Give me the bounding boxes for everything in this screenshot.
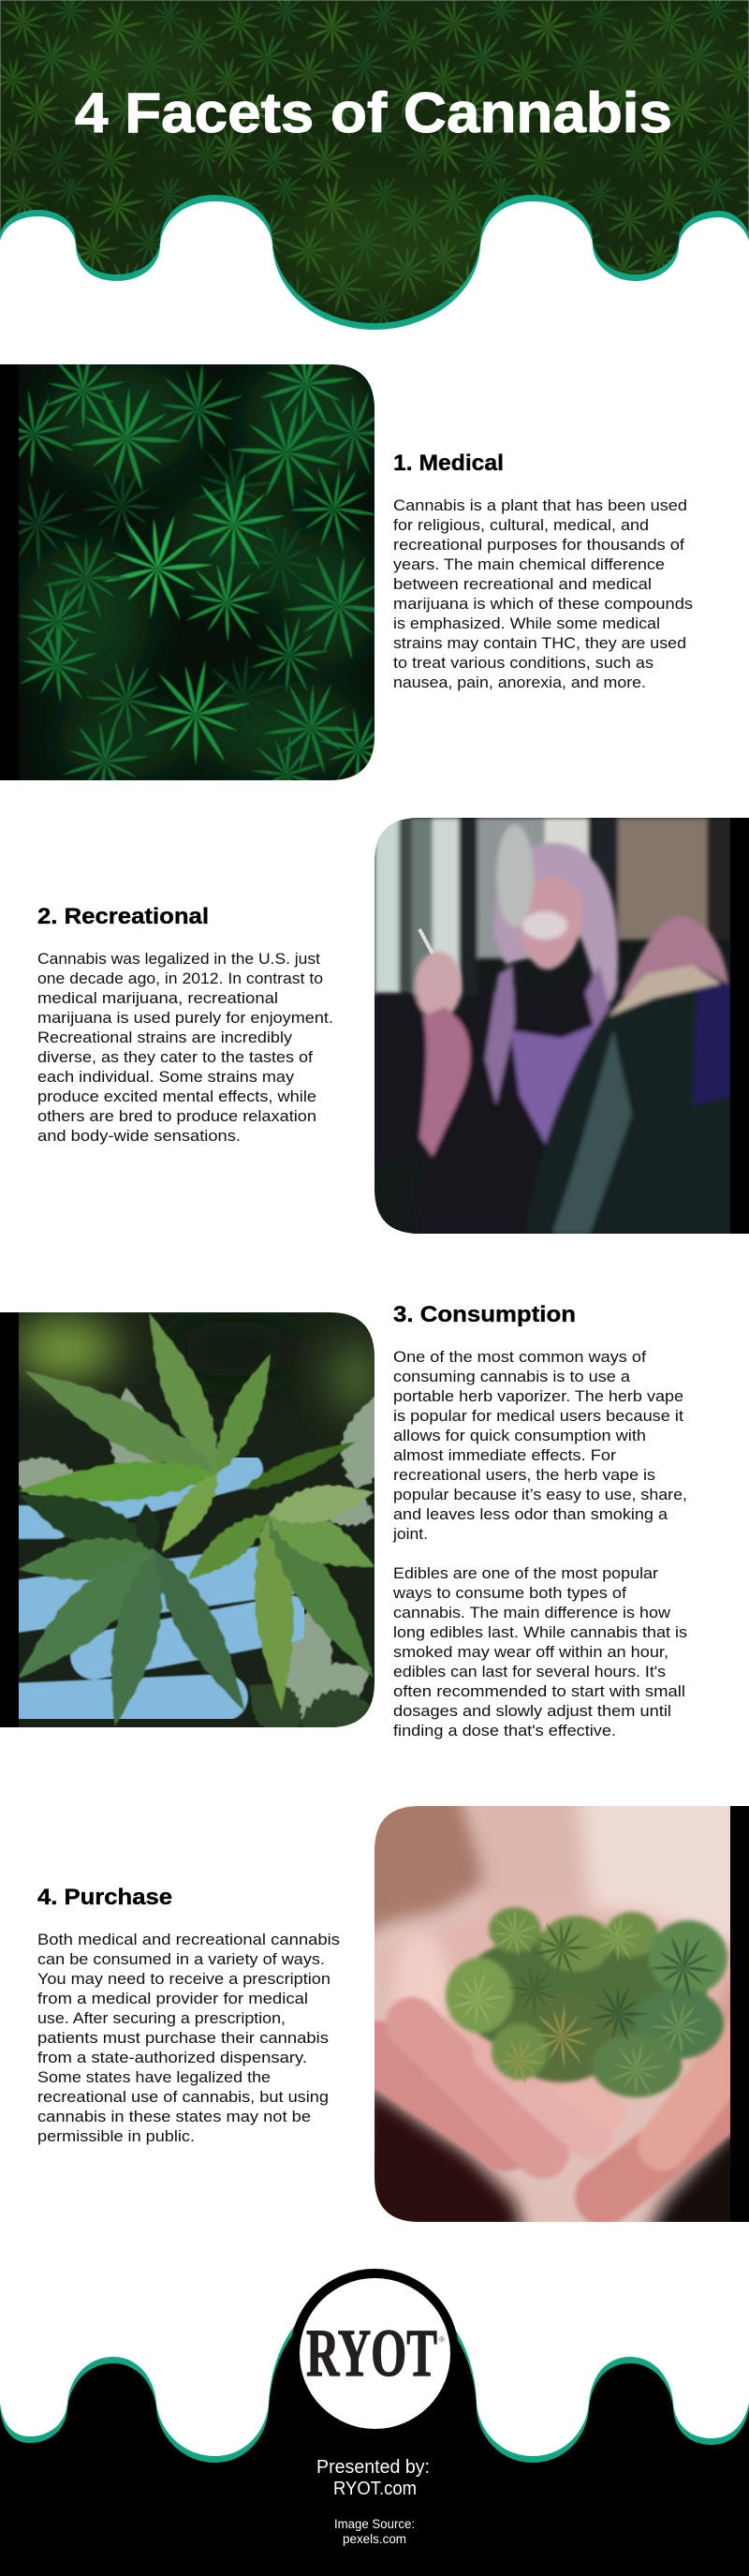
pillow [374,989,429,1162]
header white wave [0,201,749,355]
hand [415,952,462,1019]
text block: consumption: almost immediate effects. For [393,1447,617,1464]
panel: purchase photo [374,1806,749,2222]
text block: purchase [37,1932,340,2145]
background stripes [374,818,730,996]
text block: recreational: Recreational strains are incredibly [37,1029,293,1046]
torso [412,973,625,1234]
text block: purchase: cannabis in these states may not be [37,2109,311,2125]
background grey leaves [19,1386,374,1727]
text block: consumption: finding a dose that's effective. [393,1723,616,1740]
cannabis buds [446,1907,727,2102]
joint [419,929,433,954]
logo circle with RYOT wordmark: ® [439,2335,445,2344]
text block: consumption: cannabis. The main difference is how [393,1605,670,1621]
heading: 3. Consumption: 3. Consumption [393,1302,576,1327]
text block: medical: strains may contain THC, they are used [393,635,686,652]
text block: medical [393,497,693,691]
image source text: pexels.com [343,2531,406,2546]
heading: 4. Purchase: 4. Purchase [37,1885,172,1910]
black strip left [0,364,19,780]
text block: purchase: use. After securing a prescription, [37,2010,286,2027]
panel: recreational photo [374,818,749,1236]
text block: consumption: dosages and slowly adjust them until [393,1703,671,1720]
text block: purchase: from a medical provider for medical [37,1991,308,2007]
text block: medical: nausea, pain, anorexia, and more. [393,674,646,691]
text block: medical: years. The main chemical difference [393,556,665,573]
text block: recreational: produce excited mental effects, while [37,1088,316,1105]
background bokeh [14,1319,380,1414]
text block: medical: recreational purposes for thousands of [393,537,684,554]
text block: purchase: patients must purchase their cannabis [37,2030,329,2047]
text block: consumption: recreational users, the herb vape is [393,1467,655,1484]
text block: purchase: permissible in public. [37,2128,195,2145]
text block: consumption: consuming cannabis is to use a [393,1369,631,1385]
text block: recreational: each individual. Some strains may [37,1069,295,1086]
text block: consumption: allows for quick consumption with [393,1428,646,1444]
text block: consumption: popular because it’s easy to use, share, [393,1487,687,1503]
text block: recreational: one decade ago, in 2012. In contrast to [37,970,323,987]
face [521,877,582,970]
heading: 1. Medical: 1. Medical [393,451,504,476]
image source text [334,2516,415,2546]
footer black wave [0,2292,749,2576]
text block: consumption: Edibles are one of the most popular [393,1565,659,1582]
text block: consumption: One of the most common ways of [393,1349,646,1366]
presented by text: Presented by: [316,2457,430,2478]
black strip left [0,1312,19,1727]
cannabis leaves [19,1313,374,1726]
panel: consumption photo [0,1306,408,1755]
fingers [374,2023,749,2197]
text block: purchase: can be consumed in a variety of ways. [37,1951,325,1968]
text block: consumption: edibles can last for several hours. It's [393,1664,666,1680]
shirt purple [509,1023,599,1147]
text block: medical: is emphasized. While some medical [393,615,660,632]
blue gloved fingers [9,1470,290,1707]
jeans [524,953,730,1234]
text block: consumption: and leaves less odor than smoking a [393,1506,668,1523]
hair [494,843,618,1002]
text block: purchase: Both medical and recreational cannabis [37,1932,340,1948]
heading: 2. Recreational: 2. Recreational [37,904,209,929]
text block: recreational: diverse, as they cater to the tastes of [37,1049,313,1066]
image source text: Image Source: [334,2516,415,2531]
text block: medical: Cannabis is a plant that has been used [393,497,687,514]
arm [419,1007,470,1157]
text block: medical: marijuana is which of these compounds [393,596,693,613]
text block: consumption: long edibles last. While cannabis that is [393,1624,687,1641]
presented by text: RYOT.com [333,2479,417,2499]
text block: purchase: Some states have legalized the [37,2069,271,2086]
text block: consumption: smoked may wear off within an hour, [393,1644,668,1661]
text block: recreational [37,951,333,1145]
text block: purchase: recreational use of cannabis, but using [37,2089,329,2106]
text block: medical: for religious, cultural, medical, and [393,517,649,534]
text block: consumption: portable herb vaporizer. The herb vape [393,1388,683,1405]
text block: recreational: medical marijuana, recreational [37,990,278,1007]
text block: consumption: ways to consume both types of [392,1585,626,1602]
dark lower right [639,2132,730,2222]
text block: consumption: often recommended to start with small [393,1683,685,1700]
text block: consumption [392,1349,687,1740]
text block: medical: between recreational and medical [393,576,652,593]
text block: consumption: is popular for medical users because it [393,1408,683,1425]
palm [446,1903,730,2065]
header photo: cannabis field [0,0,749,337]
logo circle with RYOT wordmark [290,2269,459,2437]
left sleeve tones [356,1789,487,1939]
text block: recreational: Cannabis was legalized in the U.S. just [37,951,320,968]
panel: medical photo [0,364,374,780]
presented by text [316,2457,430,2499]
black strip right [730,1806,749,2222]
dark lower left [374,2087,535,2222]
text block: recreational: and body-wide sensations. [37,1128,241,1145]
text block: recreational: others are bred to produce relaxation [37,1108,316,1125]
footer teal wave edge [0,2286,749,2576]
text block: purchase: You may need to receive a prescription [37,1971,330,1988]
text block: recreational: marijuana is used purely for enjoyment. [37,1010,333,1027]
text block: purchase: from a state-authorized dispensary. [37,2050,307,2066]
knee [623,916,728,998]
black strip right [730,818,749,1234]
text block: consumption: joint. [392,1526,428,1543]
header teal wave edge [0,195,749,348]
logo circle with RYOT wordmark: RYOT [306,2316,437,2391]
title: 4 Facets of Cannabis [75,81,672,144]
text block: medical: to treat various conditions, such as [393,655,654,672]
